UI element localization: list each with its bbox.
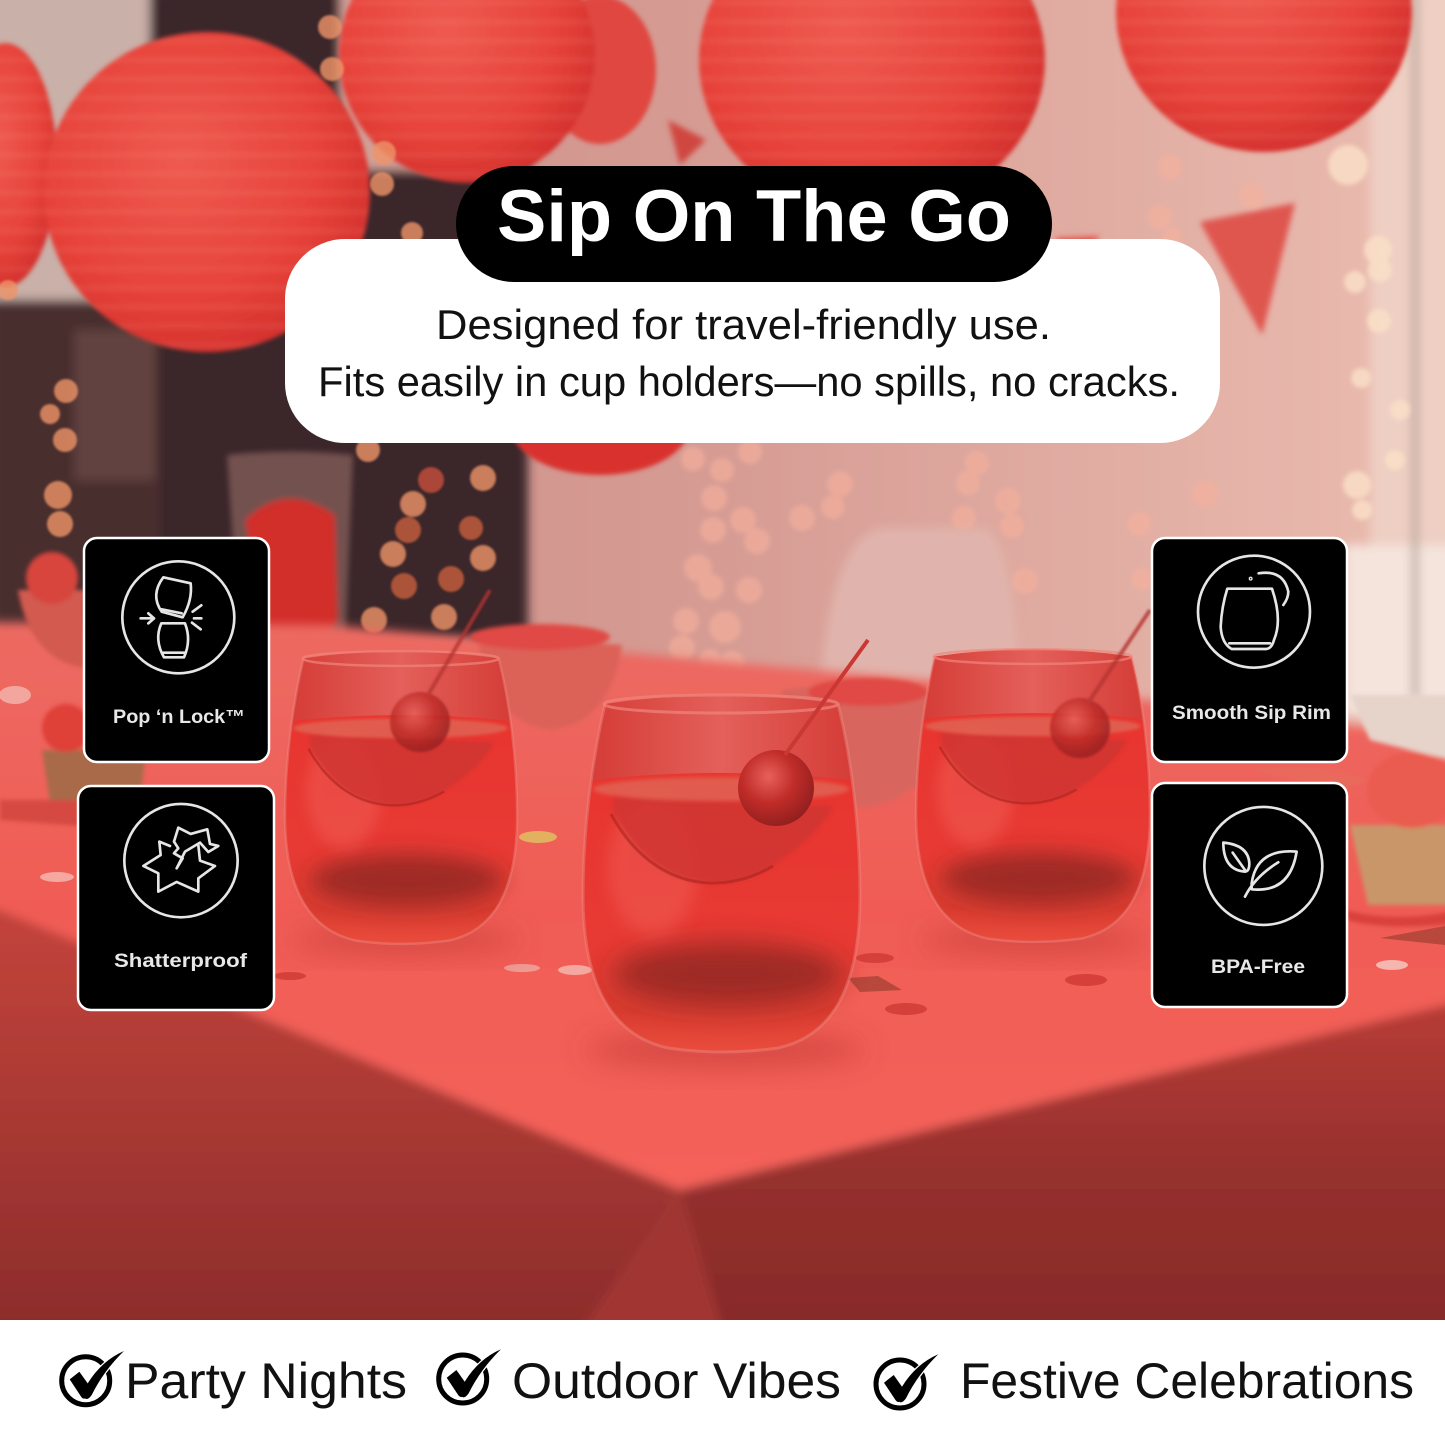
confetti <box>0 686 1445 1015</box>
icon: check 3 <box>876 1354 938 1408</box>
table drape left <box>0 902 680 1340</box>
subtitle text: Designed for travel-friendly use. <box>436 301 1051 348</box>
table top <box>0 622 1445 1190</box>
back glass with red candy <box>227 452 353 680</box>
glass center <box>583 640 868 1052</box>
title pill <box>456 166 1052 282</box>
card: Pop 'n Lock <box>84 538 269 762</box>
label: Smooth Sip Rim <box>1172 703 1331 724</box>
subtitle text <box>318 301 1180 405</box>
wall <box>0 0 1445 1000</box>
icon: leaves <box>1204 807 1322 925</box>
icon: cup with rim <box>1198 556 1310 668</box>
cherry left <box>390 590 490 752</box>
cupcakes <box>0 695 1445 927</box>
bokeh lights on dark room <box>0 15 496 633</box>
table drape right <box>680 1000 1445 1340</box>
cherry right <box>1050 610 1150 758</box>
label: BPA-Free <box>1211 957 1305 978</box>
icon: burst <box>124 804 238 917</box>
bottom strip <box>0 1320 1445 1445</box>
label: Festive Celebrations: Festive Celebrations <box>960 1353 1414 1409</box>
title: Sip On The Go <box>497 176 1011 257</box>
icon: stacked cups <box>122 561 234 673</box>
icon: check 1 <box>62 1351 124 1405</box>
cherry center <box>738 640 868 826</box>
icon: check 2 <box>439 1349 501 1403</box>
table surfaces <box>0 622 1445 1340</box>
glass left <box>285 590 517 944</box>
label: Shatterproof <box>114 951 248 972</box>
table corner fold <box>575 1190 725 1340</box>
card: Shatterproof <box>78 786 274 1010</box>
bokeh lights on wall <box>669 155 1265 677</box>
paper lanterns <box>0 0 1412 475</box>
label: Outdoor Vibes: Outdoor Vibes <box>512 1353 841 1409</box>
pennant bunting <box>668 120 1295 335</box>
label: Pop ‘n Lock™ <box>113 707 245 728</box>
card: BPA-Free <box>1152 783 1347 1007</box>
bowls <box>18 552 930 807</box>
dark room at left <box>0 0 1445 715</box>
subtitle panel <box>285 239 1220 443</box>
bokeh lights at right <box>1328 145 1410 520</box>
glass right <box>916 610 1150 942</box>
shadows under glasses <box>290 926 1150 1068</box>
white chair <box>820 528 1020 690</box>
card: Smooth Sip Rim <box>1152 538 1347 762</box>
subtitle text: Fits easily in cup holders—no spills, no cracks. <box>318 358 1180 405</box>
label: Party Nights: Party Nights <box>125 1353 407 1409</box>
